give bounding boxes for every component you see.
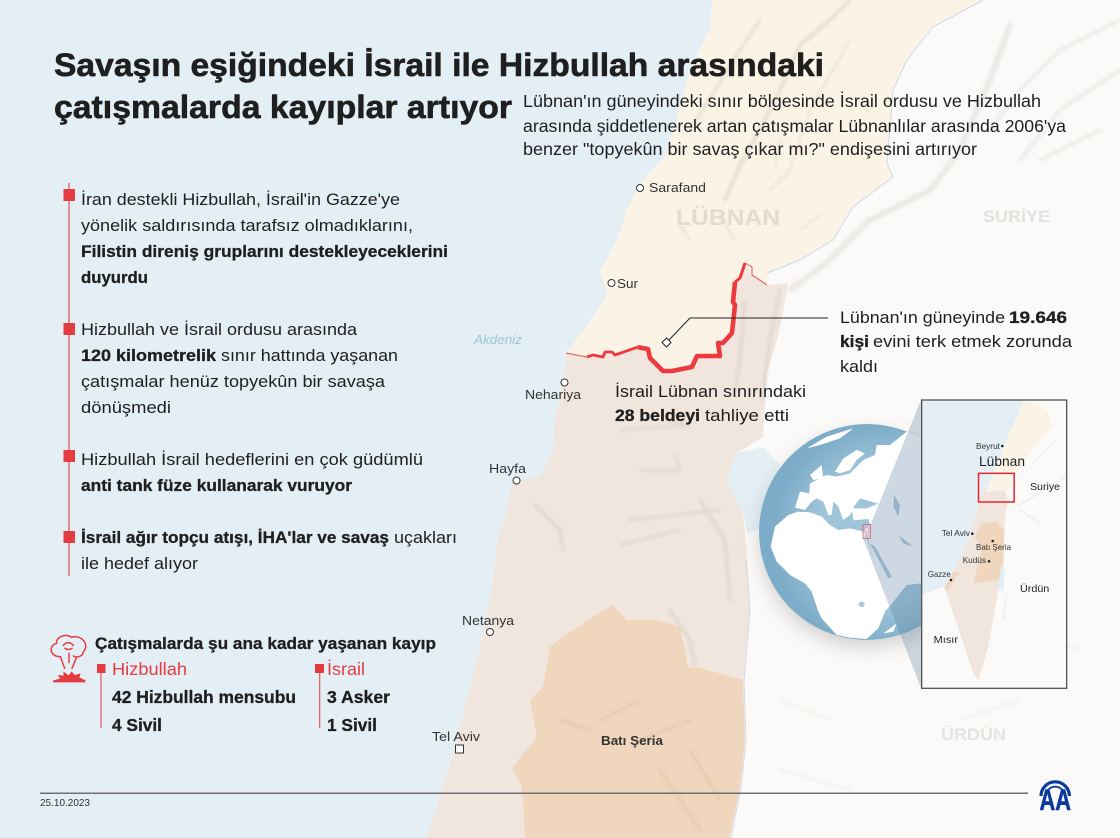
panel: key points (64, 183, 457, 576)
bullet markers (64, 189, 75, 543)
text block: point 1: yönelik saldırısında tarafsız olmadıklarını, (81, 216, 413, 235)
callout: evacuated towns: tahliye etti (705, 406, 789, 425)
city names: Sur (617, 276, 639, 291)
inset labels: Tel Aviv (942, 528, 971, 538)
label: country names (676, 205, 1050, 744)
column: İsrail: 1 Sivil (327, 715, 377, 735)
inset labels: Gazze (928, 569, 951, 579)
inset labels: Suriye (1030, 481, 1060, 493)
column: İsrail: 3 Asker (327, 687, 390, 707)
text block: point 3: Hizbullah İsrail hedeflerini en çok güdümlü (81, 450, 423, 469)
callout: evacuated towns: 28 beldeyi (615, 406, 700, 425)
subtitle: Lübnan'ın güneyindeki sınır bölgesinde İsrail ordusu ve Hizbullah (523, 91, 1041, 111)
text block: point 4: ile hedef alıyor (81, 554, 198, 573)
land: Batı Şeria (512, 605, 745, 838)
text block: point 1: duyurdu (81, 268, 148, 287)
globe land (771, 428, 937, 639)
title: Savaşın eşiğindeki İsrail ile Hizbullah arasındaki (54, 47, 824, 83)
callout: displaced people: Lübnan'ın güneyinde (840, 308, 1005, 327)
date: 25.10.2023 (40, 797, 90, 809)
zoom wedge (863, 400, 921, 688)
city names: Sarafand (649, 180, 706, 195)
column: İsrail (315, 659, 390, 735)
callout: evacuated towns: İsrail Lübnan sınırındaki (615, 382, 806, 401)
inset terrain (1003, 440, 1067, 620)
text block: point 2: çatışmalar henüz topyekûn bir savaşa (81, 372, 386, 391)
city names: Nehariya (525, 387, 582, 402)
callout: displaced people (662, 308, 1073, 376)
callout: displaced people: evini terk etmek zorunda (873, 332, 1073, 351)
column: Hizbullah: 42 Hizbullah mensubu (112, 687, 296, 707)
city names (432, 180, 706, 744)
water: Taberiye lake (727, 447, 780, 533)
inset labels: Ürdün (1020, 583, 1049, 595)
inset Gaza (944, 572, 959, 590)
inset labels: Lübnan (979, 453, 1025, 469)
text block: point 4 (81, 528, 457, 573)
inset Israel (944, 490, 1008, 680)
inset focus box (978, 473, 1014, 502)
text block: point 2 (81, 320, 398, 417)
text block: point 2: sınır hattında yaşanan (221, 346, 398, 365)
column: Hizbullah: 4 Sivil (112, 715, 162, 735)
column: Hizbullah: Hizbullah (112, 659, 187, 679)
text block: point 2: Hizbullah ve İsrail ordusu arasında (81, 320, 358, 339)
inset dead sea (998, 567, 1005, 592)
footer rule (40, 792, 1028, 794)
text block: point 4: uçakları (394, 528, 457, 547)
text block: point 2: 120 kilometrelik (81, 346, 217, 365)
globe (752, 400, 921, 688)
column: Hizbullah (97, 659, 296, 735)
inset labels: Mısır (934, 634, 959, 646)
text block: point 1 (81, 190, 448, 287)
title (54, 47, 824, 125)
label: Akdeniz: Akdeniz (473, 332, 523, 347)
border line: İsrail-Lübnan (566, 263, 767, 371)
logo: Anadolu Ajansı: AA (1040, 784, 1071, 817)
callout: displaced people: kişi (840, 332, 869, 351)
location marker (863, 524, 871, 538)
globe seas (859, 495, 913, 607)
text block: point 1: Filistin direniş gruplarını destekleyeceklerini (81, 242, 448, 261)
land: Lübnan (566, 0, 983, 371)
city markers (456, 184, 644, 753)
label: country names: LÜBNAN (676, 205, 780, 230)
inset city dots (950, 445, 1004, 581)
panel: inset locator map (922, 400, 1067, 688)
logo: Anadolu Ajansı (1040, 782, 1071, 817)
land: İsrail (427, 263, 788, 838)
subtitle: benzer "topyekûn bir savaş çıkar mı?" endişesini artırıyor (523, 139, 977, 159)
text block: point 3 (81, 450, 423, 495)
inset West Bank (973, 522, 1004, 583)
inset Lebanon (982, 401, 1052, 493)
label: Batı Şeria: Batı Şeria (601, 733, 664, 748)
label: country names: ÜRDÜN (941, 725, 1006, 744)
text block: point 2: dönüşmedi (81, 398, 171, 417)
inset labels: Batı Şeria (976, 542, 1011, 552)
icon: explosion mushroom cloud (51, 635, 86, 682)
panel: casualties (51, 635, 436, 735)
callout: displaced people: 19.646 (1009, 308, 1067, 327)
callout: evacuated towns (615, 382, 806, 425)
title: çatışmalarda kayıplar artıyor (54, 89, 512, 125)
inset frame (922, 400, 1067, 688)
subtitle (523, 91, 1066, 159)
inset labels (928, 441, 1060, 646)
text block: point 1: İran destekli Hizbullah, İsrail'in Gazze'ye (81, 190, 400, 209)
label: country names: SURİYE (983, 207, 1050, 226)
map labels (432, 180, 1050, 753)
city names: Hayfa (489, 461, 527, 476)
heading: Çatışmalarda şu ana kadar yaşanan kayıp (95, 635, 436, 653)
inset labels: Beyrut (976, 441, 1001, 451)
land: neighbouring countries (427, 0, 1120, 838)
timeline line (68, 183, 70, 576)
text block: point 4: İsrail ağır topçu atışı, İHA'lar ve savaş (81, 528, 389, 547)
column: İsrail: İsrail (327, 659, 365, 679)
subtitle: arasında şiddetlenerek artan çatışmalar Lübnanlılar arasında 2006'ya (523, 116, 1066, 136)
callout: displaced people: kaldı (840, 357, 878, 376)
water: rivers and borders (731, 0, 983, 838)
city names: Netanya (462, 613, 515, 628)
city names: Tel Aviv (432, 729, 481, 744)
inset labels: Kudüs (963, 555, 986, 565)
inset sea (922, 400, 1023, 595)
text block: point 3: anti tank füze kullanarak vuruyor (81, 476, 352, 495)
terrain hillshade (535, 0, 1120, 830)
